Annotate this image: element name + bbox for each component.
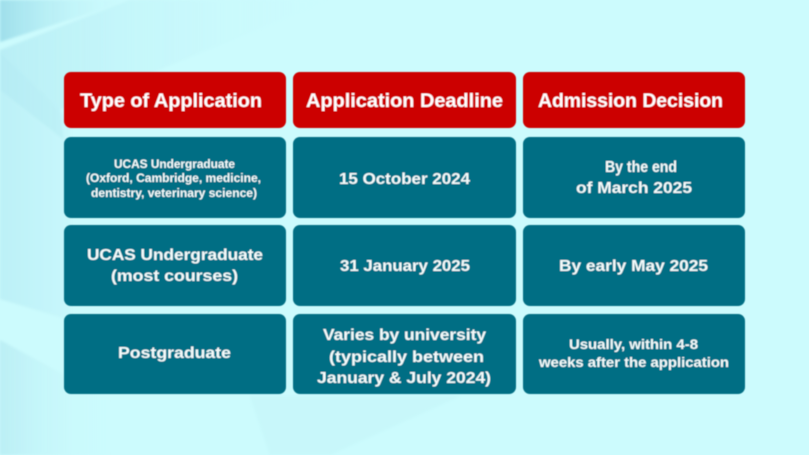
cell: Usually within 4-8 weeks: weeks after the application bbox=[538, 354, 729, 370]
cell: 31 January 2025 bbox=[293, 225, 516, 306]
cell: UCAS Undergraduate most courses: (most courses) bbox=[111, 268, 238, 285]
table bbox=[64, 72, 745, 394]
cell: Postgraduate: Postgraduate bbox=[118, 345, 231, 362]
cell: Usually within 4-8 weeks bbox=[523, 314, 745, 394]
cell: 31 January 2025: 31 January 2025 bbox=[340, 258, 470, 275]
header: Type of Application: Type of Application bbox=[80, 91, 262, 112]
cell: By the end of March 2025: By the end bbox=[605, 159, 677, 176]
cell: Varies by university: (typically between bbox=[329, 349, 484, 366]
cell: UCAS Undergraduate most courses: UCAS Undergraduate bbox=[87, 247, 263, 264]
cell: Usually within 4-8 weeks: Usually, within 4-8 bbox=[569, 336, 698, 352]
header: Admission Decision: Admission Decision bbox=[538, 91, 723, 112]
cell: UCAS Undergraduate Oxford type: (Oxford, Cambridge, medicine, bbox=[86, 173, 261, 185]
cell: UCAS Undergraduate most courses bbox=[64, 225, 286, 306]
cell: Varies by university: January & July 2024) bbox=[317, 370, 491, 387]
cell: UCAS Undergraduate Oxford type: UCAS Undergraduate bbox=[114, 159, 235, 171]
header: Type of Application bbox=[64, 72, 286, 128]
header: Application Deadline: Application Deadline bbox=[306, 91, 503, 112]
cell: 15 October 2024: 15 October 2024 bbox=[339, 171, 470, 188]
header: Admission Decision bbox=[523, 72, 745, 128]
cell: Varies by university bbox=[293, 314, 516, 394]
cell: By the end of March 2025: of March 2025 bbox=[576, 180, 692, 197]
cell: UCAS Undergraduate Oxford type bbox=[64, 137, 286, 218]
cell: By early May 2025: By early May 2025 bbox=[559, 258, 708, 275]
cell: 15 October 2024 bbox=[293, 137, 516, 218]
cell: Varies by university: Varies by university bbox=[323, 327, 486, 344]
cell: UCAS Undergraduate Oxford type: dentistry, veterinary science) bbox=[91, 188, 257, 200]
cell: By early May 2025 bbox=[523, 225, 745, 306]
header: Application Deadline bbox=[293, 72, 516, 128]
cell: By the end of March 2025 bbox=[523, 137, 745, 218]
cell: Postgraduate bbox=[64, 314, 286, 394]
